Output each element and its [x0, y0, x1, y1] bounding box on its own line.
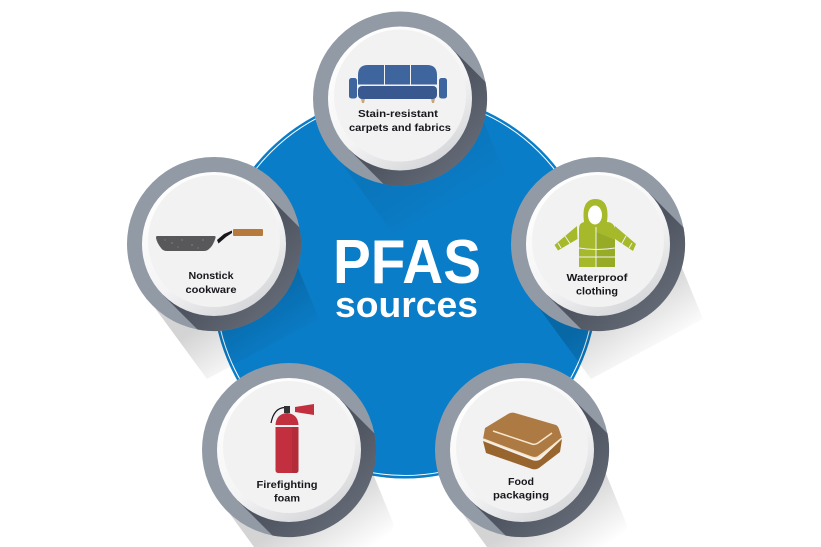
- label: [186, 270, 237, 296]
- label: [349, 108, 451, 134]
- panel: stain-resistant carpets and fabrics: [313, 12, 505, 234]
- label: Stain-resistant: [358, 108, 439, 120]
- icon: food container: [483, 413, 562, 469]
- label: Firefighting: [256, 479, 318, 491]
- panel: firefighting foam: [202, 363, 394, 547]
- label: [256, 479, 318, 504]
- label: [566, 272, 628, 298]
- label: foam: [274, 492, 300, 504]
- panel: waterproof clothing: [511, 157, 703, 379]
- title: PFAS sources: sources: [335, 284, 478, 325]
- icon: frying pan: [156, 229, 263, 251]
- label: Waterproof: [566, 272, 628, 284]
- title: PFAS sources: [333, 228, 481, 325]
- label: cookware: [186, 284, 237, 296]
- title: PFAS sources: PFAS: [333, 228, 481, 297]
- panel: nonstick cookware: [127, 157, 319, 379]
- label: Food: [508, 476, 534, 488]
- label: Nonstick: [188, 270, 234, 282]
- panel: food packaging: [435, 363, 627, 547]
- label: clothing: [576, 286, 618, 298]
- icon: sofa: [349, 65, 447, 103]
- label: [493, 476, 549, 502]
- icon: fire extinguisher: [271, 404, 314, 473]
- icon: green jacket: [554, 199, 636, 267]
- central blue circle: [212, 94, 598, 478]
- label: carpets and fabrics: [349, 122, 451, 134]
- label: packaging: [493, 490, 549, 502]
